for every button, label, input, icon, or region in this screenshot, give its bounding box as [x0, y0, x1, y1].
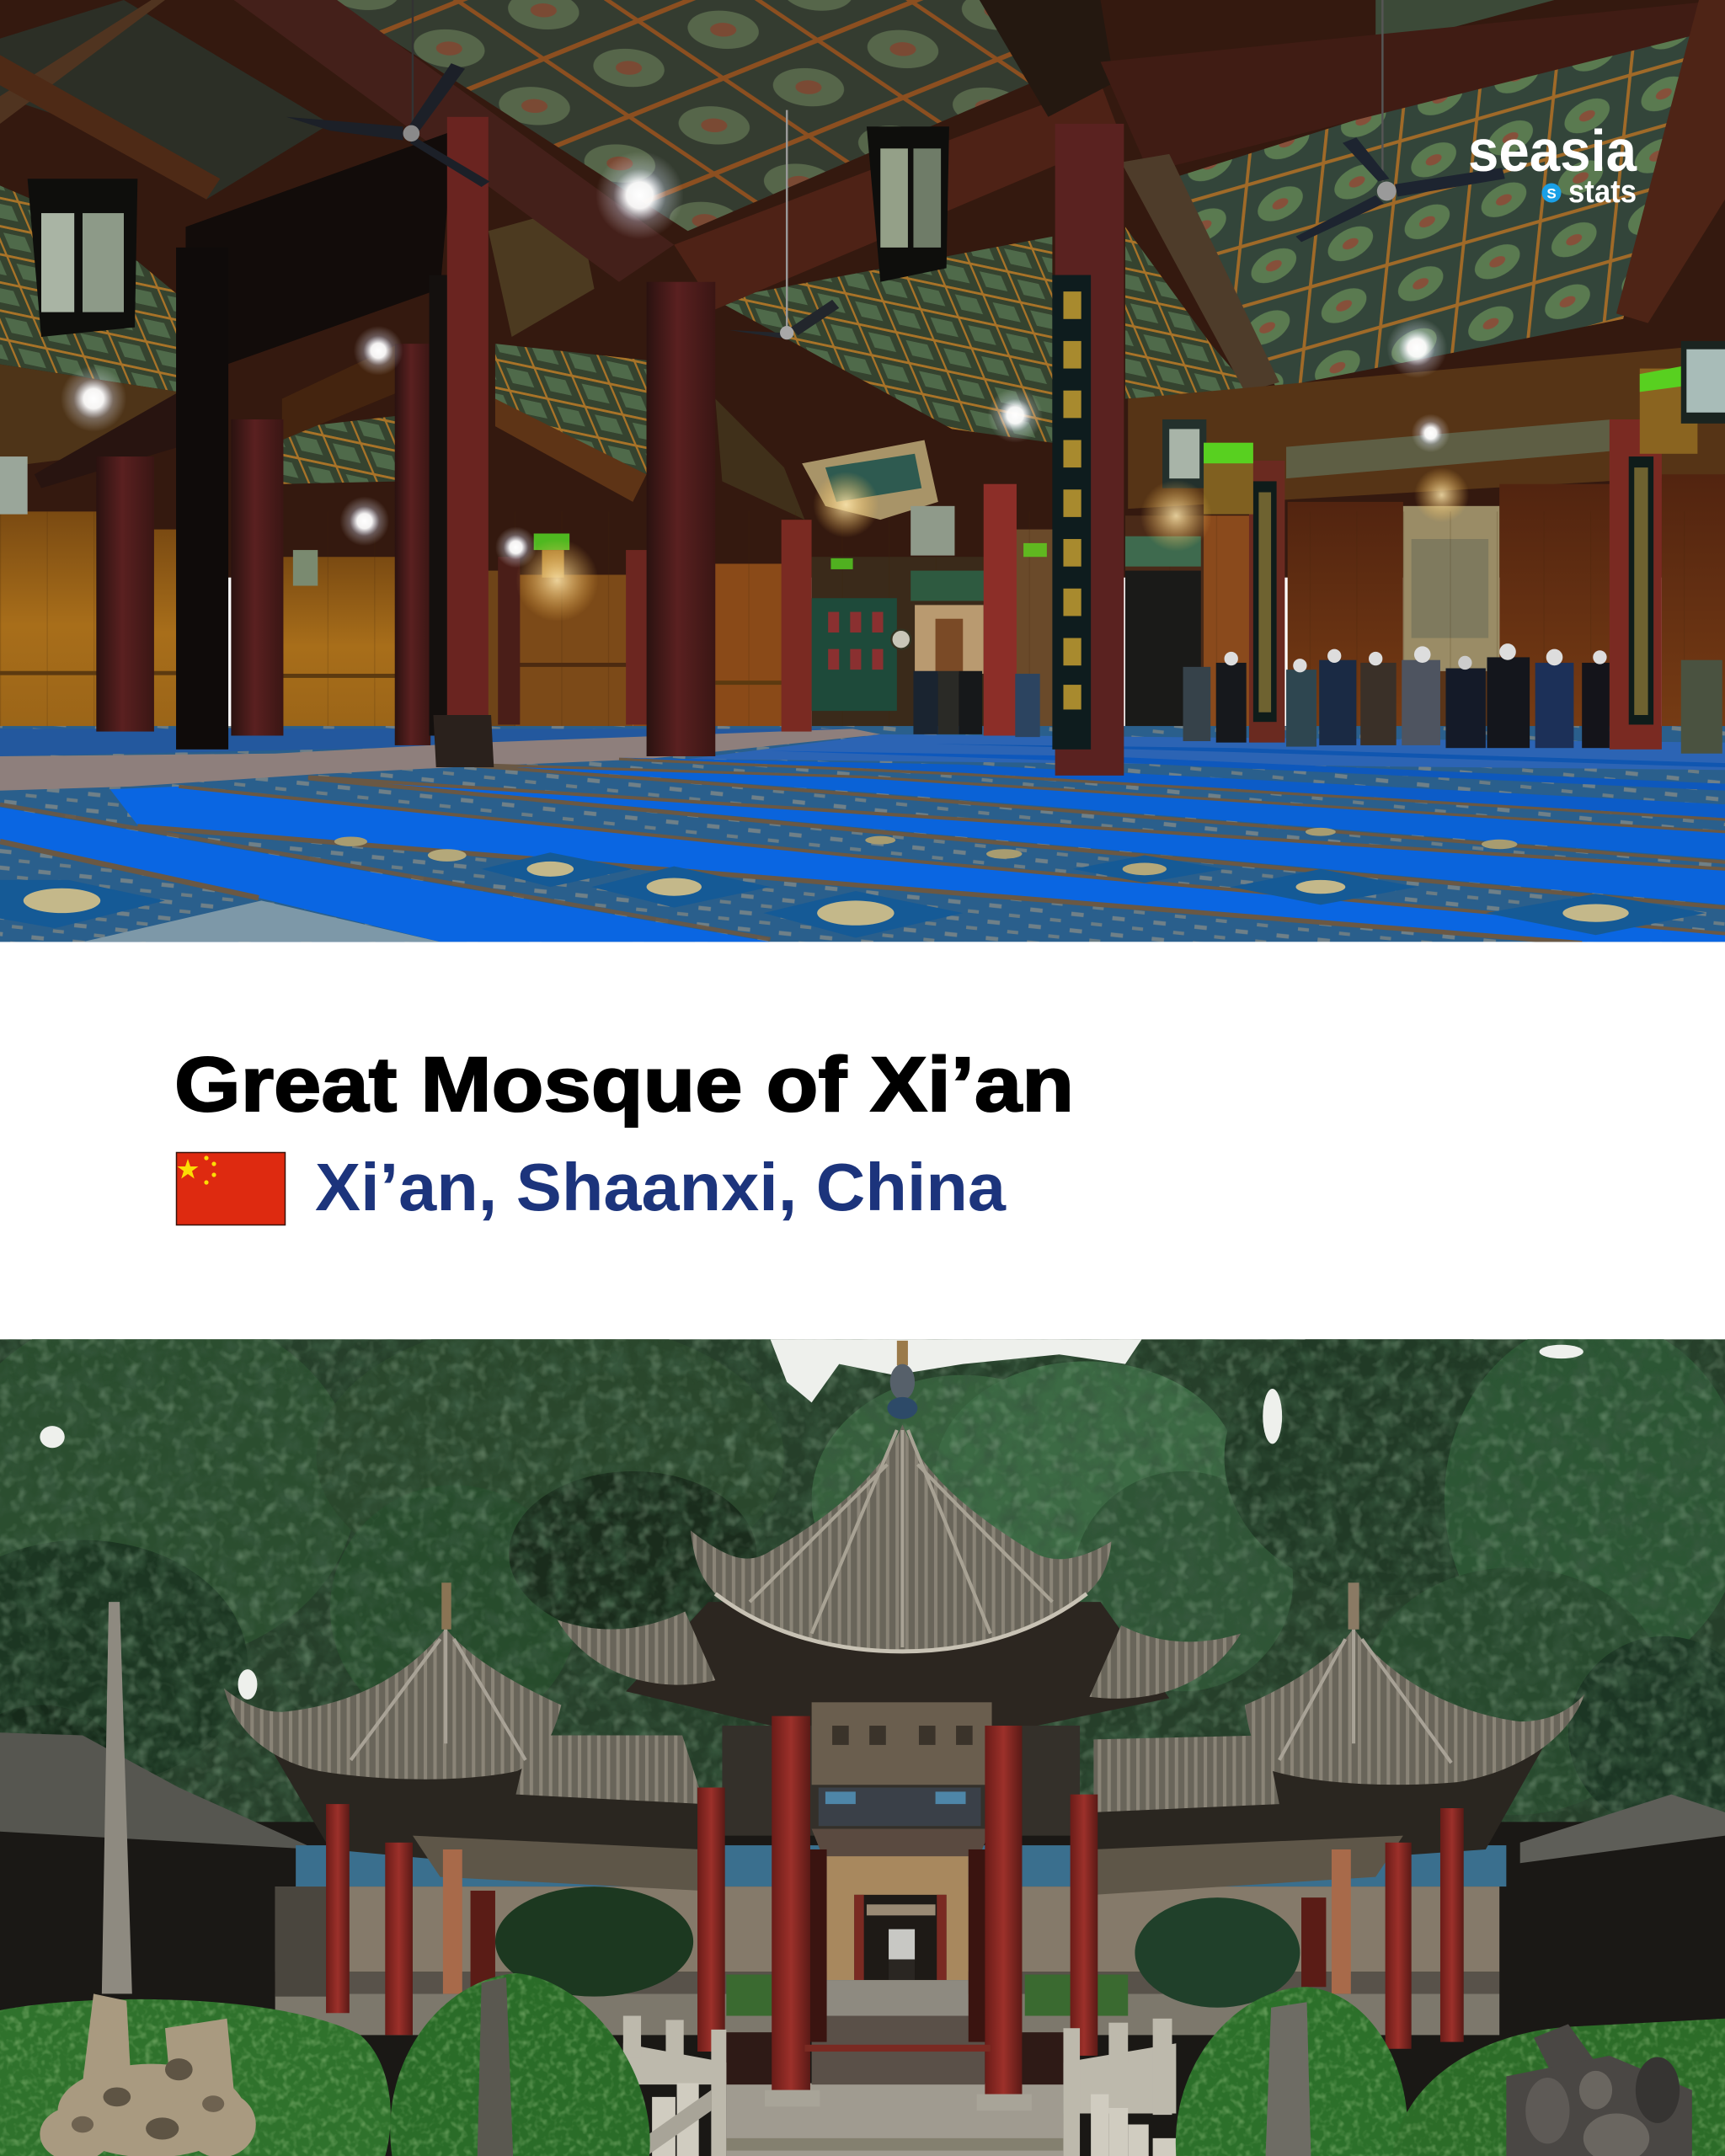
right scholar rock: [1506, 2024, 1692, 2156]
hedges: [0, 1973, 1725, 2156]
back buildings: [0, 1732, 1725, 2156]
lanterns: [0, 126, 1725, 586]
left balustrade: [591, 2016, 726, 2156]
sky gaps: [40, 1339, 1583, 1700]
dark lintel: [185, 133, 447, 364]
logo: seasia stats: [1468, 118, 1637, 210]
photo: pavilion courtyard: [0, 1306, 1725, 2156]
hedge texture: [0, 1967, 1725, 2156]
roof finial: [887, 1341, 917, 1419]
lower wing eaves: [557, 1612, 1241, 1699]
right upper wall band: [1128, 344, 1725, 509]
main roof: [691, 1424, 1112, 1652]
carpet borders: [0, 759, 1725, 943]
ceiling beams: [0, 0, 1725, 520]
columns: [96, 117, 1662, 776]
garden shrubs behind: [495, 1886, 1300, 2016]
worshippers: [913, 643, 1722, 754]
red rail: [804, 2045, 991, 2052]
stone floor: [725, 2016, 1071, 2156]
subtitle: location: Xi’an, Shaanxi, China: [315, 1150, 1007, 1225]
icon: flag of China: [177, 1152, 285, 1225]
carpeted floor: [0, 726, 1725, 942]
right balustrade: [1063, 2019, 1176, 2156]
photo: prayer hall interior: [0, 0, 1725, 943]
left scholar rock: [40, 1993, 256, 2156]
logo icon: S: [1546, 185, 1557, 202]
right wing roof: [1245, 1582, 1584, 1785]
column plinths: [765, 2090, 1032, 2111]
green doors and arch: [812, 536, 1201, 728]
walls: [0, 475, 1725, 726]
trees: [0, 1339, 1725, 1822]
carpet medallions: [0, 828, 1706, 938]
pavilion upper structure: [261, 1602, 1547, 1895]
column gold ornaments: [1063, 291, 1648, 715]
title: Great Mosque of Xi’an: [174, 1042, 1074, 1128]
left wing roof: [224, 1582, 561, 1780]
logo icon: [1541, 184, 1562, 202]
standing stones: [478, 1977, 1311, 2156]
logo wordmark: seasia: [1468, 118, 1637, 184]
logo sub text: stats: [1568, 174, 1637, 210]
tree trunk: [102, 1602, 132, 1993]
centre gateway: [827, 1849, 969, 2019]
ceiling lights: [61, 152, 1469, 622]
ceiling base: [0, 0, 1725, 578]
ceiling coffers: [0, 0, 1699, 484]
banner: [802, 440, 938, 520]
red columns: [326, 1716, 1464, 2095]
ceiling fans: [286, 0, 1505, 339]
plaque: [812, 1702, 992, 1785]
foliage texture: [0, 1339, 1725, 1822]
side connecting roofs: [515, 1735, 1279, 1812]
